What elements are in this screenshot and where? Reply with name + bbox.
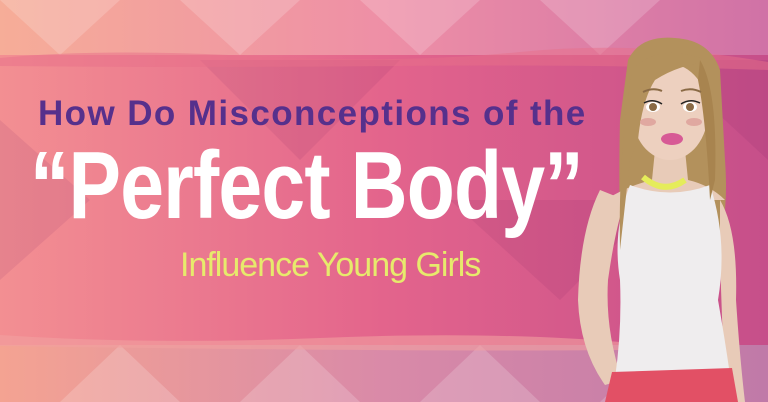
hair back — [619, 38, 726, 322]
title main: Perfect Body: “Perfect Body” — [30, 132, 583, 239]
necklace — [643, 177, 685, 187]
face — [632, 64, 708, 160]
subtitle: Influence Young Girls — [180, 246, 480, 284]
top — [615, 185, 730, 378]
eyes — [646, 102, 660, 112]
cheeks — [640, 118, 656, 126]
title line 1: How Do Misconceptions of the — [38, 94, 587, 133]
neck/shoulders — [605, 150, 725, 200]
arms — [578, 190, 625, 385]
illustration: girl — [578, 38, 745, 402]
skirt — [605, 368, 738, 402]
hair front — [620, 53, 710, 250]
lips — [661, 133, 683, 145]
